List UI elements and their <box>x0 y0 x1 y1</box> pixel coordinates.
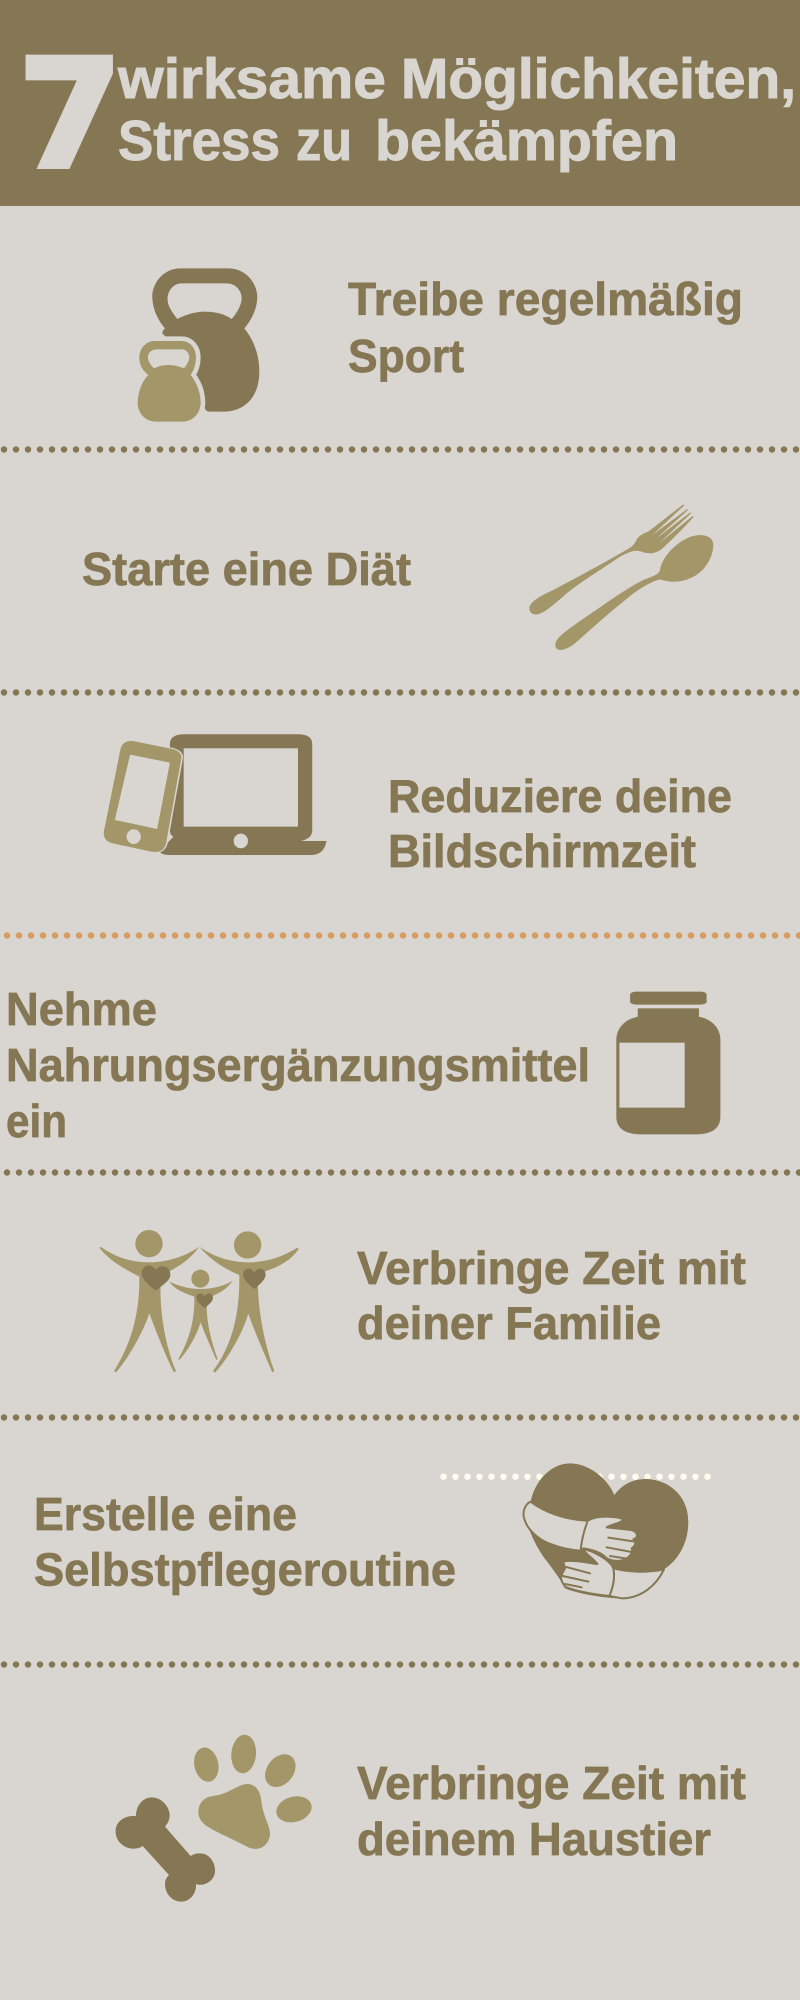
icon: paw and bone <box>116 1734 315 1902</box>
icon: kettlebells <box>138 268 259 422</box>
icon: supplement jar <box>616 992 720 1134</box>
panel: pet <box>116 1734 746 1902</box>
heading: self care <box>34 1488 456 1596</box>
heading: supplements <box>6 983 590 1147</box>
title text: Möglichkeiten, <box>401 47 796 111</box>
panel: self care <box>34 1463 710 1598</box>
title text: Stress <box>118 109 280 173</box>
heading: family <box>357 1242 746 1349</box>
icon: family with hearts <box>99 1230 299 1373</box>
heading: self care: Selbstpflegeroutine <box>34 1544 456 1596</box>
icon: self-hugging heart <box>524 1463 688 1598</box>
heading: sport: Sport <box>348 330 464 382</box>
heading: screen time <box>388 770 732 877</box>
heading: family: deiner Familie <box>357 1297 661 1349</box>
heading: supplements: ein <box>6 1095 67 1147</box>
title text: bekämpfen <box>375 109 678 173</box>
heading: diet: Starte eine Diät <box>82 543 411 595</box>
panel: screen time <box>103 734 732 877</box>
panel: sport <box>138 268 743 422</box>
heading: pet <box>357 1757 746 1865</box>
panel: supplements <box>6 983 720 1147</box>
heading: supplements: Nehme <box>6 983 157 1035</box>
title text: zu <box>296 109 352 173</box>
heading: screen time: Bildschirmzeit <box>388 825 696 877</box>
title text: wirksame <box>117 47 386 111</box>
icon: fork and spoon <box>529 504 713 650</box>
title text <box>117 47 796 173</box>
icon: laptop and phone <box>103 734 327 855</box>
heading: self care: Erstelle eine <box>34 1488 297 1540</box>
heading: family: Verbringe Zeit mit <box>357 1242 746 1294</box>
heading: sport: Treibe regelmäßig <box>348 273 743 325</box>
heading: pet: deinem Haustier <box>357 1813 711 1865</box>
heading: sport <box>348 273 743 382</box>
heading: supplements: Nahrungsergänzungsmittel <box>6 1039 590 1091</box>
numeral 7: 7 <box>18 28 122 202</box>
heading: screen time: Reduziere deine <box>388 770 732 822</box>
panel: diet <box>82 504 713 650</box>
header: title banner <box>0 0 800 206</box>
panel: family <box>99 1230 746 1373</box>
heading: pet: Verbringe Zeit mit <box>357 1757 746 1809</box>
